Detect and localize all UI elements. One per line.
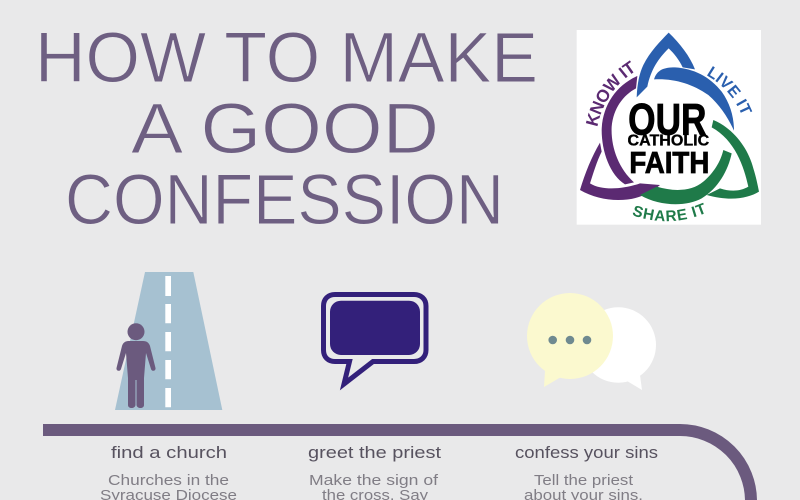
logo knot: purple arc: [580, 76, 660, 200]
title: A GOOD: [131, 90, 439, 169]
step: find a church: [100, 443, 237, 500]
step: greet the priest: greet the priest: [308, 443, 441, 462]
title: HOW TO MAKE: [35, 19, 538, 98]
logo text: OUR CATHOLIC FAITH: OUR: [628, 95, 706, 144]
icon: road with person: [115, 272, 222, 410]
step: find a church: Churches in the: [108, 472, 229, 489]
logo text: OUR CATHOLIC FAITH: CATHOLIC: [627, 133, 709, 150]
step: confess your sins: Tell the priest: [534, 472, 634, 489]
title: CONFESSION: [65, 161, 504, 240]
logo text: KNOW IT: KNOW IT: [586, 60, 634, 126]
logo text: LIVE IT: LIVE IT: [707, 66, 752, 113]
title: [35, 19, 538, 240]
logo text: SHARE IT: SHARE IT: [632, 202, 704, 222]
logo text: OUR CATHOLIC FAITH: [627, 95, 709, 180]
icon: speech bubble: [324, 294, 426, 384]
logo knot: green arc: [640, 120, 759, 204]
step: find a church: find a church: [111, 443, 227, 462]
step: greet the priest: Make the sign of: [309, 472, 439, 489]
step: confess your sins: [515, 443, 658, 500]
logo knot: blue arc: [637, 33, 734, 131]
timeline path: [43, 430, 751, 500]
step: greet the priest: [308, 443, 441, 500]
logo: Our Catholic Faith: [576, 30, 761, 224]
logo text: OUR CATHOLIC FAITH: FAITH: [629, 146, 709, 180]
icon: chat bubbles: [527, 293, 656, 390]
step: confess your sins: confess your sins: [515, 443, 658, 462]
